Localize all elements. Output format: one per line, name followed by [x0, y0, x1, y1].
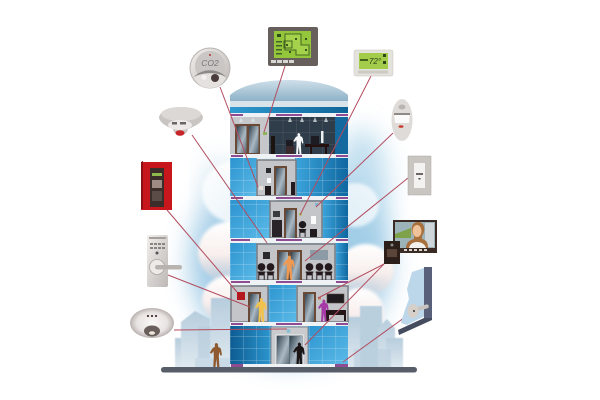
lever handle — [155, 265, 182, 270]
ground slab — [161, 367, 417, 372]
roof band — [230, 101, 348, 107]
top blue strip — [230, 107, 348, 113]
wooden double door — [235, 124, 260, 154]
chair and lamp — [299, 221, 306, 237]
ground floor — [230, 326, 348, 367]
device: CO2 sensor — [190, 48, 230, 88]
floor 4 ledge — [230, 238, 348, 243]
dome roof — [230, 80, 348, 101]
connector lines — [167, 66, 408, 362]
white figure — [293, 133, 303, 154]
ceiling sensor — [286, 329, 290, 333]
base ledge — [230, 364, 348, 367]
floor 1 ledge — [230, 113, 348, 117]
device: video intercom screen — [393, 220, 437, 253]
floor 2 ledge — [230, 154, 348, 158]
intercom handset — [318, 297, 321, 300]
city skyline left — [175, 298, 231, 368]
device: ceiling sensor — [130, 308, 174, 338]
black figure with intercom — [293, 342, 305, 366]
device: window with contact sensor — [398, 267, 432, 335]
door right — [303, 292, 316, 322]
temperature reading: 72° — [369, 57, 382, 66]
floorplan on screen — [285, 34, 309, 55]
left room — [231, 286, 268, 322]
purple figure — [318, 300, 329, 322]
woman on the screen — [406, 222, 428, 248]
red LED emblem — [176, 130, 184, 136]
city skyline right — [348, 306, 403, 368]
wall art and lamp — [266, 168, 271, 173]
red fire panel on wall — [237, 292, 245, 300]
device: touchscreen panel — [268, 27, 318, 66]
device: fire alarm panel — [141, 161, 172, 210]
clouds — [198, 160, 394, 336]
green wall panel — [263, 132, 267, 135]
device: electronic door lock — [147, 235, 182, 287]
device: motion sensor — [392, 99, 412, 141]
entrance doors — [276, 335, 303, 367]
device: door intercom — [384, 241, 400, 264]
floor 2 — [230, 158, 348, 196]
floor 3 ledge — [230, 196, 348, 200]
contact sensor — [414, 304, 429, 312]
CO2 wall unit — [259, 186, 263, 190]
waiting chairs — [258, 263, 265, 280]
floor 4: lobby — [230, 243, 348, 280]
open doors — [277, 250, 302, 280]
wall screen — [327, 294, 344, 303]
floor 5 ledge — [230, 280, 348, 285]
floor 6 ledge — [230, 322, 348, 326]
panel buttons — [271, 60, 294, 63]
door left — [248, 292, 261, 322]
floor 3 — [230, 200, 348, 238]
floor 1: boardroom — [230, 117, 348, 155]
orange figure — [283, 256, 295, 280]
shelving — [272, 220, 282, 237]
background glow behind building — [190, 128, 390, 362]
building — [230, 80, 348, 367]
device: smoke detector — [159, 107, 203, 136]
right room — [297, 286, 348, 322]
pedestrian outside — [210, 343, 222, 368]
floor 5 — [231, 285, 348, 322]
door — [284, 208, 297, 238]
desk — [326, 310, 346, 321]
yellow figure — [255, 298, 267, 322]
door — [274, 166, 287, 195]
thermostat and sensor — [299, 213, 302, 216]
device: thermostat — [354, 50, 393, 76]
wall art and mirror — [263, 252, 270, 259]
boardroom furniture — [271, 136, 275, 154]
CO2 label: CO2 — [201, 58, 219, 68]
device: wall switch — [408, 156, 431, 195]
